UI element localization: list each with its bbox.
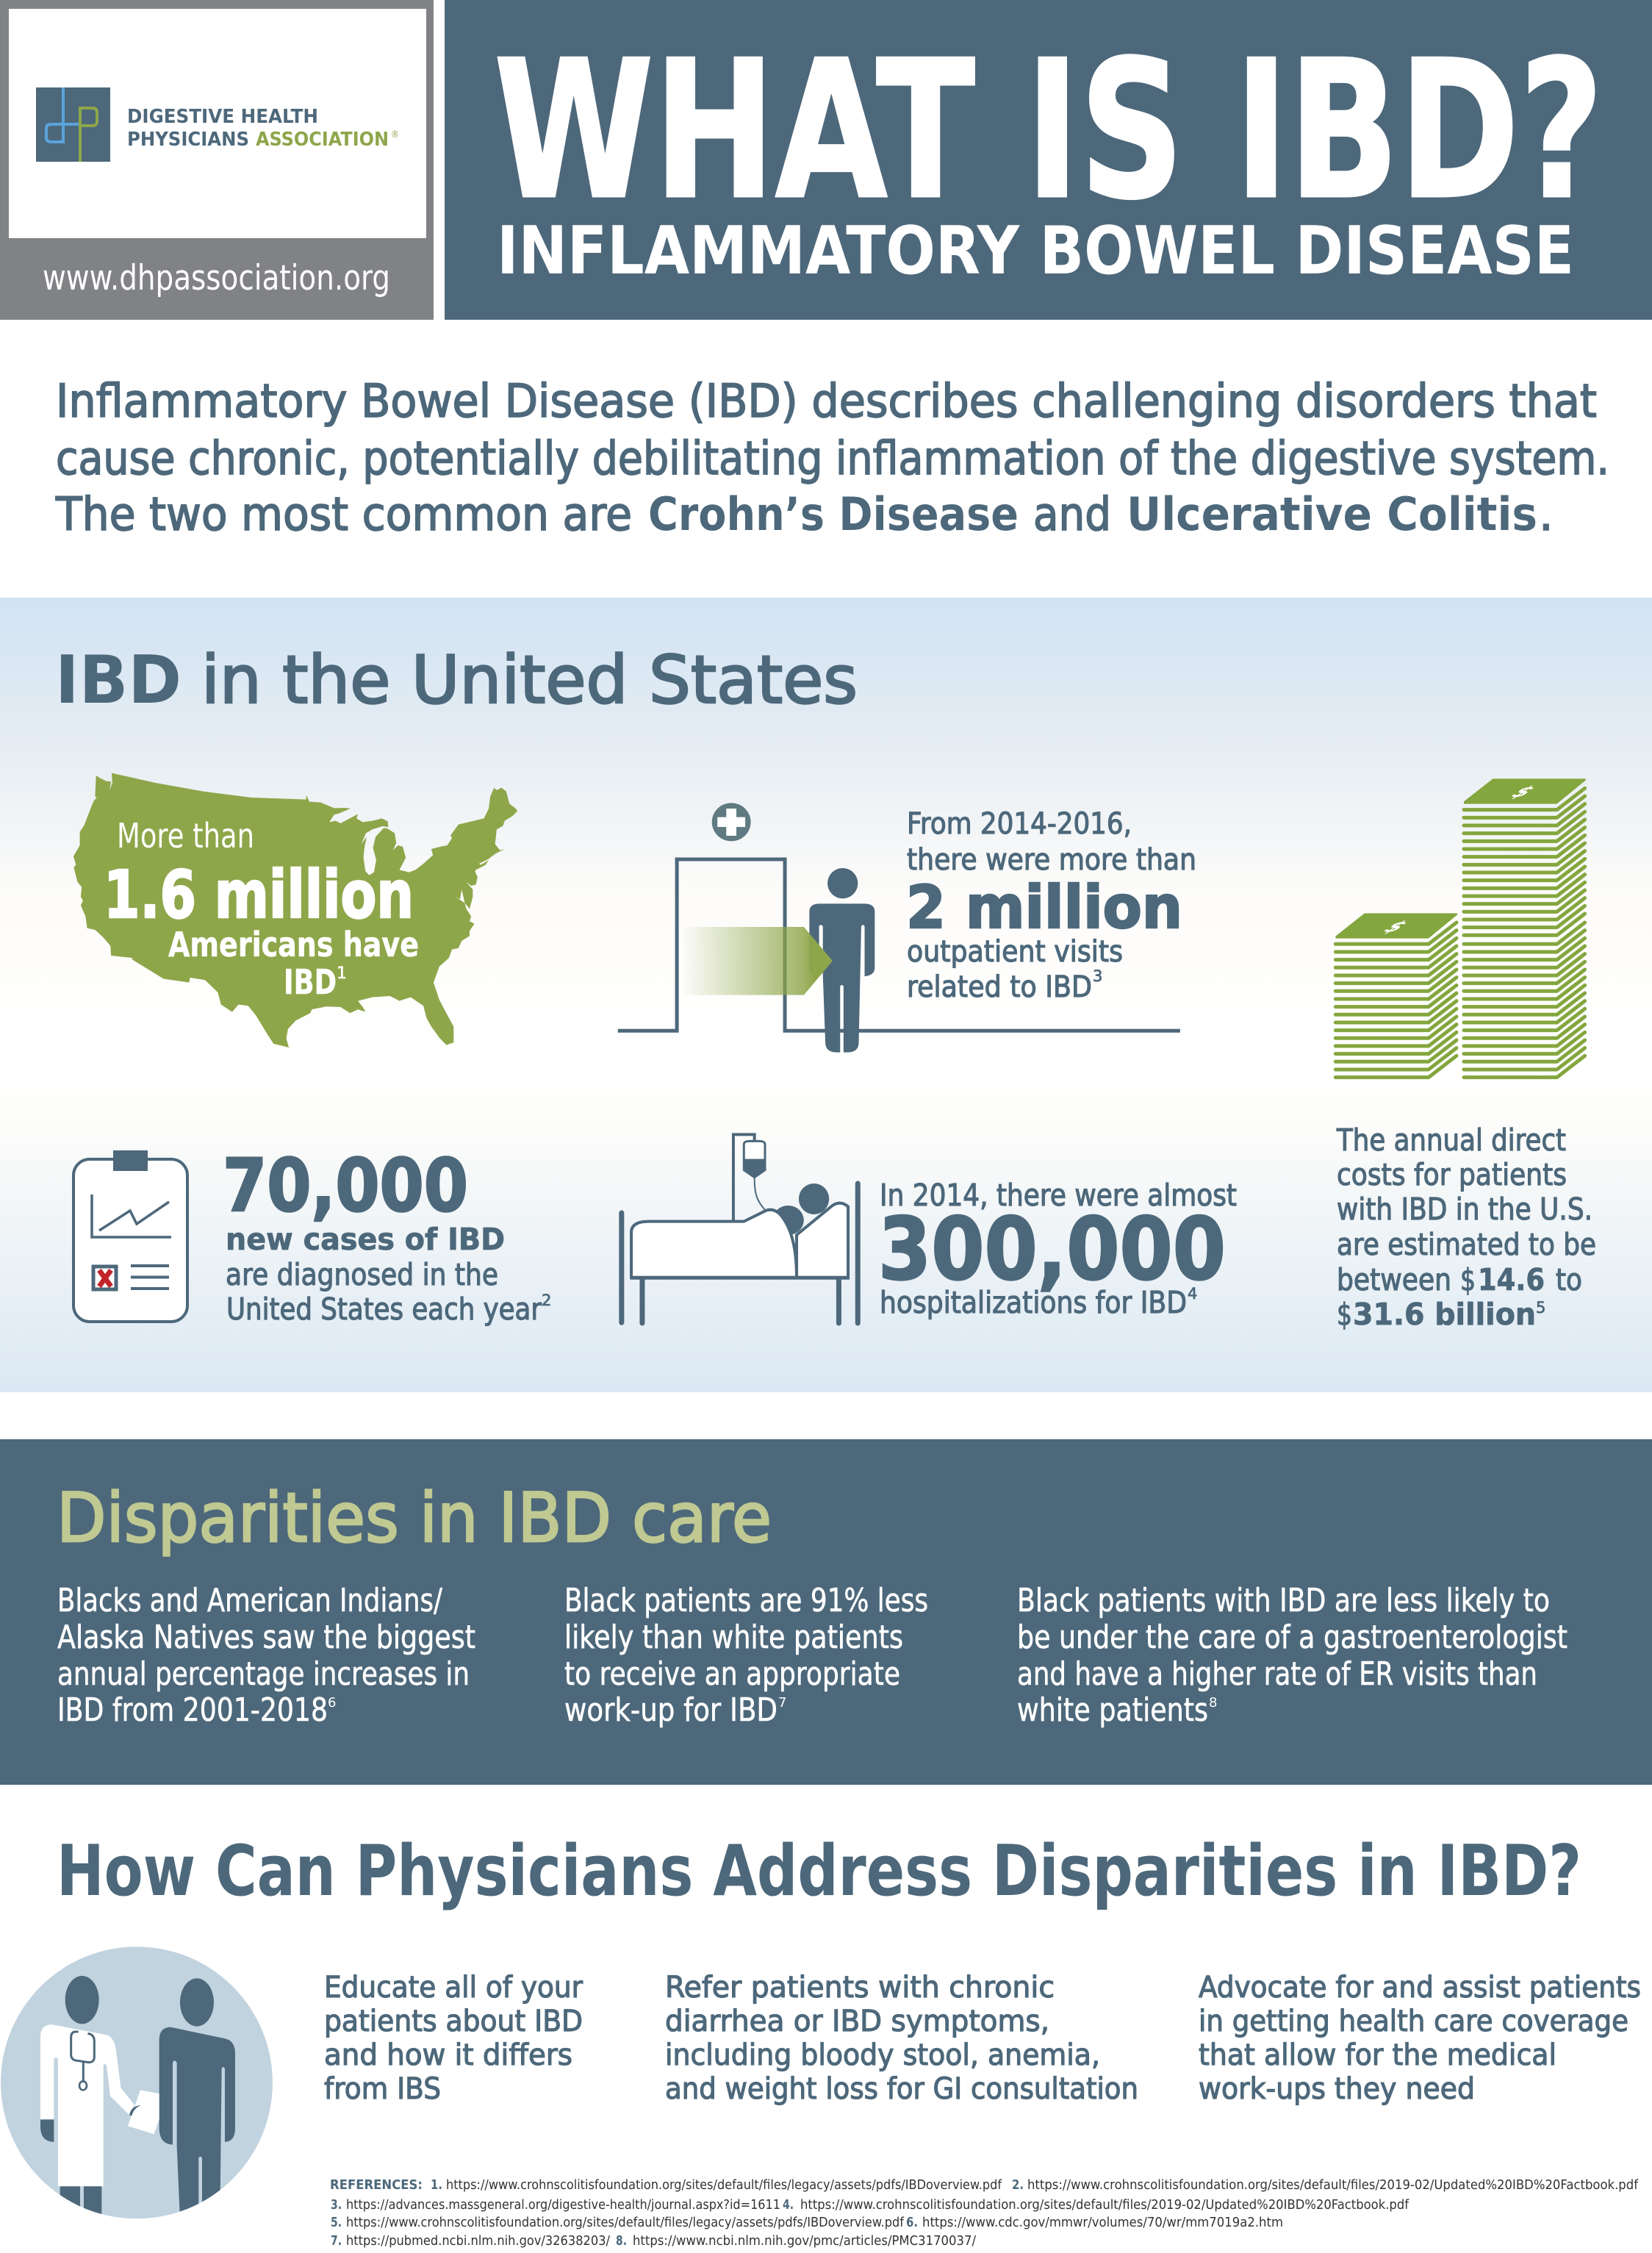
text block: advocate [1199,1971,1641,2106]
stat: annual direct costs: are estimated to be [1337,1227,1596,1262]
text block: educate: and how it differs [324,2038,572,2072]
references: 3. [331,2197,342,2213]
text block: educate: from IBS [324,2072,441,2106]
stat: annual direct costs: with IBD in the U.S. [1337,1192,1592,1227]
stat: annual direct costs: between [1337,1262,1451,1297]
icon: clinic door with patient [618,803,1180,1053]
text block: advocate: in getting health care coverage [1199,2005,1628,2038]
references: 5. [331,2215,342,2230]
stat: 70,000 new cases: new cases of IBD [226,1222,505,1257]
icon: doctor and patient [1,1946,273,2227]
stat: annual direct costs: The annual direct [1336,1122,1566,1158]
text block: work-up: work-up for IBD [564,1691,777,1729]
stat: 2 million outpatient visits: 3 [1093,967,1102,985]
stat: annual direct costs: 14.6 [1478,1262,1545,1297]
stat: 70,000 new cases: United States each year [226,1292,542,1327]
heading: in the United States [201,642,858,719]
website url: www.dhpassociation.org [43,258,390,298]
stat: annual direct costs: $ [1337,1297,1352,1332]
icon: IV drip [733,1134,765,1222]
intro paragraph: Inflammatory Bowel Disease (IBD) describes challenging disorders that [56,374,1597,428]
references: 7. [331,2233,342,2249]
stat: annual direct costs: to [1556,1262,1582,1297]
stat: 300,000 hospitalizations [878,1178,1237,1320]
text block: gastroenterologist [1017,1582,1567,1729]
logo wordmark [127,106,399,151]
stat: 1.6 million Americans: 1 [337,964,347,983]
stat: 300,000 hospitalizations: hospitalizations for IBD [880,1285,1187,1320]
logo wordmark: ASSOCIATION [256,129,389,151]
stat: 2 million outpatient visits [906,807,1196,1004]
icon: DHPA logo mark [36,87,110,162]
text block: refer: and weight loss for GI consultation [665,2072,1138,2106]
panel: logo box [0,0,434,320]
text block: gastroenterologist: and have a higher rate of ER visits than [1017,1655,1537,1693]
stat: 1.6 million Americans: Americans have [168,925,419,964]
references: 2. [1012,2177,1024,2193]
stat: 2 million outpatient visits: outpatient visits [907,935,1123,969]
panel: IBD in the United States [0,598,1652,1392]
text block: gastroenterologist: white patients [1017,1691,1208,1729]
text block: refer: Refer patients with chronic [665,1971,1055,2005]
references [330,2177,1639,2249]
references: https://www.crohnscolitisfoundation.org/sites/default/files/legacy/assets/pdfs/IBDoverview.pdf [346,2215,905,2230]
icon: tall stack [1464,780,1585,1078]
logo wordmark: DIGESTIVE HEALTH [127,106,318,128]
intro paragraph: Ulcerative Colitis [1127,487,1537,541]
intro paragraph: and [1033,487,1111,541]
icon: tall stack: $ [1504,784,1542,800]
stat: 1.6 million Americans: More than [117,816,254,856]
text block: refer [665,1971,1138,2106]
text block: refer: diarrhea or IBD symptoms, [665,2005,1049,2038]
references: https://www.ncbi.nlm.nih.gov/pmc/articles/PMC3170037/ [633,2233,977,2249]
logo wordmark: ® [391,129,399,140]
stat: 300,000 hospitalizations: 4 [1188,1285,1197,1303]
text block: advocate: that allow for the medical [1199,2038,1556,2072]
stat: 300,000 hospitalizations: 300,000 [878,1199,1226,1300]
stat: annual direct costs [1336,1122,1596,1332]
stat: 70,000 new cases: are diagnosed in the [226,1257,498,1292]
intro paragraph: The two most common are [55,487,632,541]
stat: 2 million outpatient visits: related to IBD [907,970,1092,1004]
icon: clipboard [73,1150,187,1322]
stat: 300,000 hospitalizations: In 2014, there were almost [880,1178,1237,1213]
text block: educate [324,1971,583,2106]
text block: work-up: likely than white patients [564,1619,903,1656]
stat: annual direct costs: costs for patients [1337,1157,1567,1192]
text block: educate: patients about IBD [324,2005,583,2038]
stat: 2 million outpatient visits: 2 million [906,873,1182,942]
logo wordmark: PHYSICIANS [127,129,249,151]
stat: annual direct costs: 5 [1536,1299,1545,1317]
text block: refer: including bloody stool, anemia, [665,2038,1100,2072]
references: https://www.crohnscolitisfoundation.org/sites/default/files/legacy/assets/pdfs/IBDoverview.pdf [446,2177,1002,2193]
stat: annual direct costs: 31.6 billion [1353,1297,1536,1332]
icon: medical cross [712,803,751,841]
text block: work-up: to receive an appropriate [564,1655,900,1693]
icon: short stack [1335,914,1457,1078]
text block: American Indians [57,1582,475,1729]
references: 4. [783,2197,794,2213]
panel: title banner [445,0,1652,320]
heading: IBD [55,642,182,719]
icon: stacks of money [1335,780,1585,1078]
references: https://pubmed.ncbi.nlm.nih.gov/32638203/ [346,2233,611,2249]
icon: person [809,868,875,1053]
icon: short stack: $ [1376,918,1415,935]
references: 1. [431,2177,442,2193]
stat: 70,000 new cases [223,1144,551,1327]
icon: US map [73,773,517,1047]
text block: American Indians: Alaska Natives saw the biggest [57,1619,475,1656]
references: 6. [906,2215,918,2230]
text block: American Indians: 6 [328,1695,336,1711]
references: https://www.cdc.gov/mmwr/volumes/70/wr/mm7019a2.htm [922,2215,1283,2230]
icon: hospital bed [622,1134,858,1323]
intro paragraph: . [1539,487,1554,541]
icon: doctor [40,1976,134,2227]
heading: Disparities in IBD care [57,1478,772,1558]
text block: educate: Educate all of your [324,1971,583,2005]
text block: work-up: 7 [778,1695,786,1711]
text block: American Indians: IBD from 2001-2018 [57,1691,328,1729]
stat: 2 million outpatient visits: there were more than [907,843,1196,877]
references: REFERENCES: [330,2177,423,2193]
panel: Disparities in IBD care [0,1439,1652,1785]
intro paragraph [55,374,1609,541]
references: https://advances.massgeneral.org/digestive-health/journal.aspx?id=1611 [346,2197,780,2213]
intro paragraph: Crohn’s Disease [648,487,1019,541]
stat: 1.6 million Americans: 1.6 million [104,856,414,933]
icon: patient [159,2027,235,2220]
text block: work-up [564,1582,928,1729]
text block: advocate: work-ups they need [1199,2072,1475,2106]
text block: work-up: Black patients are 91% less [564,1582,928,1619]
text block: American Indians: annual percentage increases in [57,1655,470,1693]
text block: gastroenterologist: 8 [1209,1695,1217,1711]
references: https://www.crohnscolitisfoundation.org/sites/default/files/2019-02/Updated%20IBD%20Factbook.pdf [800,2197,1409,2213]
stat: 70,000 new cases: 2 [542,1292,551,1309]
stat: 70,000 new cases: 70,000 [223,1144,468,1228]
references: 8. [616,2233,627,2249]
text block: gastroenterologist: Black patients with IBD are less likely to [1017,1582,1550,1619]
stat: annual direct costs: $ [1460,1262,1476,1297]
text block: American Indians: Blacks and American Indians/ [57,1582,442,1619]
stat: 2 million outpatient visits: From 2014-2016, [907,807,1132,841]
stat: 1.6 million Americans: IBD [284,962,337,1002]
arrow [680,927,833,995]
icon: paper [128,2090,159,2134]
stat: 1.6 million Americans [104,816,419,1002]
